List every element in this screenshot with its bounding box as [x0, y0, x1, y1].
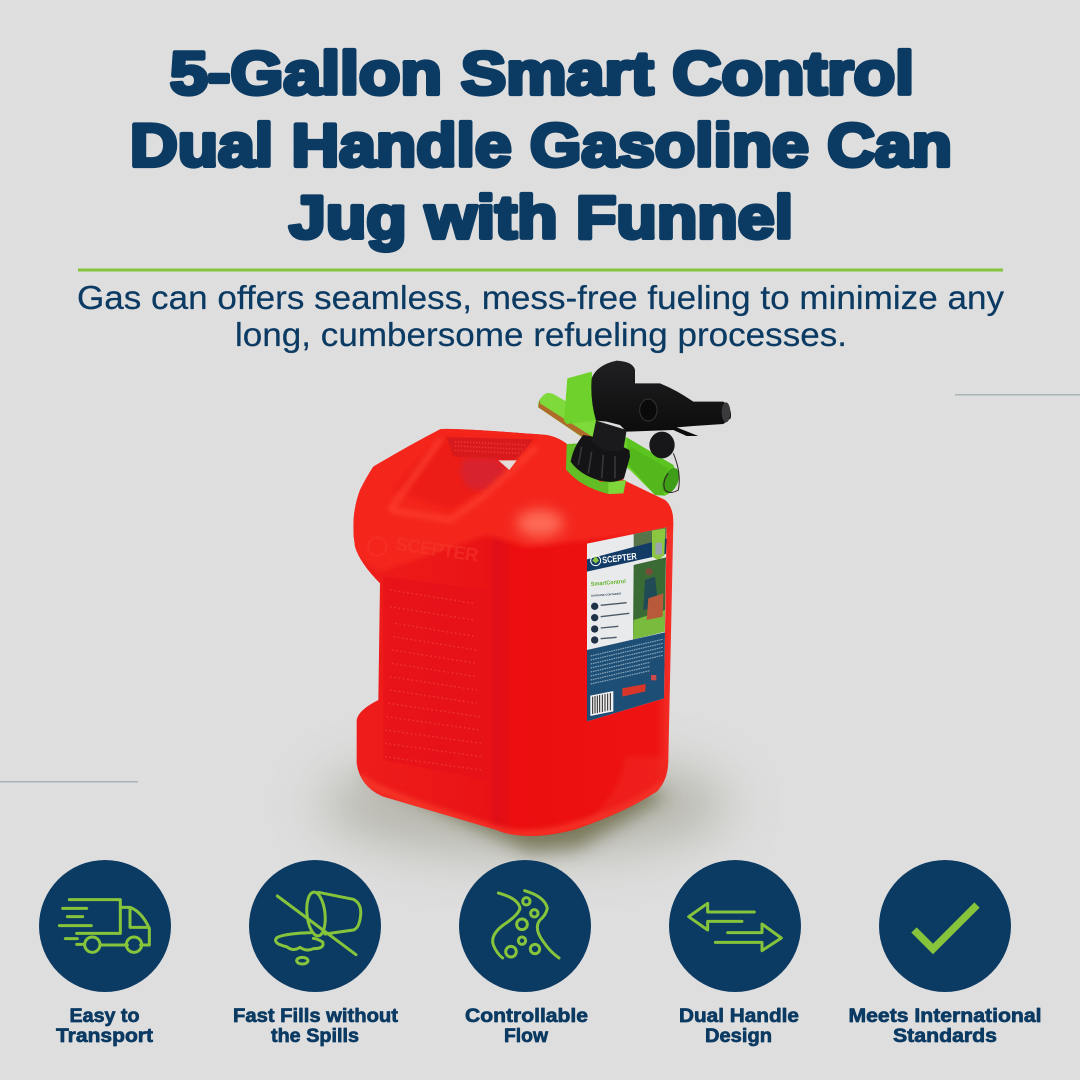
label: [679, 1006, 799, 1047]
label: Standards: [893, 1026, 997, 1047]
label text: SmartControl: [591, 579, 626, 588]
label top photo: [634, 527, 667, 547]
icon: check mark: [879, 860, 1011, 992]
feature: easy to transport: [39, 860, 171, 1047]
icon: flow channel with bubbles: [459, 860, 591, 992]
label lower panel: [587, 632, 665, 721]
label: [848, 1006, 1042, 1047]
handle recess: [399, 439, 508, 508]
title: [130, 40, 952, 251]
label: Flow: [504, 1026, 548, 1047]
black screw cap: [571, 435, 630, 482]
label lifestyle photo: [633, 557, 666, 639]
embossed warning panel: [385, 590, 481, 770]
product label: [587, 527, 667, 721]
feature: controllable flow: [459, 860, 591, 1047]
feature: fast fills without the spills: [233, 860, 399, 1047]
title: 5-Gallon Smart Control: [170, 40, 914, 107]
label backing: [587, 527, 667, 721]
product label: SCEPTER: [602, 551, 638, 565]
label: Easy to: [70, 1006, 140, 1027]
label: the Spills: [271, 1026, 359, 1047]
handle opening: [498, 460, 517, 470]
handle rim highlight: [390, 438, 537, 520]
icon: opposing arrows: [669, 860, 801, 992]
green collar: [566, 443, 626, 494]
flag: [651, 675, 656, 680]
black spout: [591, 361, 731, 436]
label: [465, 1006, 588, 1047]
label feature bullets: [591, 603, 629, 644]
label: Meets International: [848, 1006, 1042, 1027]
handle grip band: [447, 437, 533, 460]
subtitle: long, cumbersome refueling processes.: [235, 316, 847, 353]
title: Jug with Funnel: [289, 184, 793, 251]
icon: spilled bucket crossed out: [249, 860, 381, 992]
label: Dual Handle: [679, 1006, 799, 1027]
brand band: [587, 538, 667, 572]
label: Transport: [56, 1026, 154, 1047]
product shadow: [320, 755, 730, 855]
label: [56, 1006, 154, 1047]
base rim highlight: [360, 777, 665, 834]
green funnel tube: [538, 393, 682, 496]
label: Design: [705, 1026, 772, 1047]
label: Fast Fills without: [233, 1006, 399, 1027]
subtitle: Gas can offers seamless, mess-free fueling to minimize any: [77, 279, 1005, 316]
dust cap and lanyard: [649, 432, 679, 492]
gas can product photo: [347, 361, 731, 840]
handle well: [460, 458, 508, 490]
feature: dual handle design: [669, 860, 801, 1047]
label: Controllable: [465, 1006, 588, 1027]
product label: GASOLINE CONTAINER: [591, 592, 621, 598]
base corner highlight: [600, 758, 661, 812]
label: [233, 1006, 399, 1047]
spout neck: [592, 421, 627, 451]
green funnel clip: [564, 372, 596, 424]
shoulder highlight: [517, 509, 563, 537]
subtitle: [77, 279, 1005, 353]
embossed brand: SCEPTER: [394, 533, 480, 566]
icon: delivery truck: [39, 860, 171, 992]
label red warning: [622, 684, 646, 697]
qr badge: [652, 528, 665, 560]
label barcode: [590, 691, 613, 716]
can body: [347, 417, 680, 840]
can top shoulder: [353, 428, 674, 569]
feature: meets international standards: [848, 860, 1042, 1047]
title: Dual Handle Gasoline Can: [130, 112, 952, 179]
